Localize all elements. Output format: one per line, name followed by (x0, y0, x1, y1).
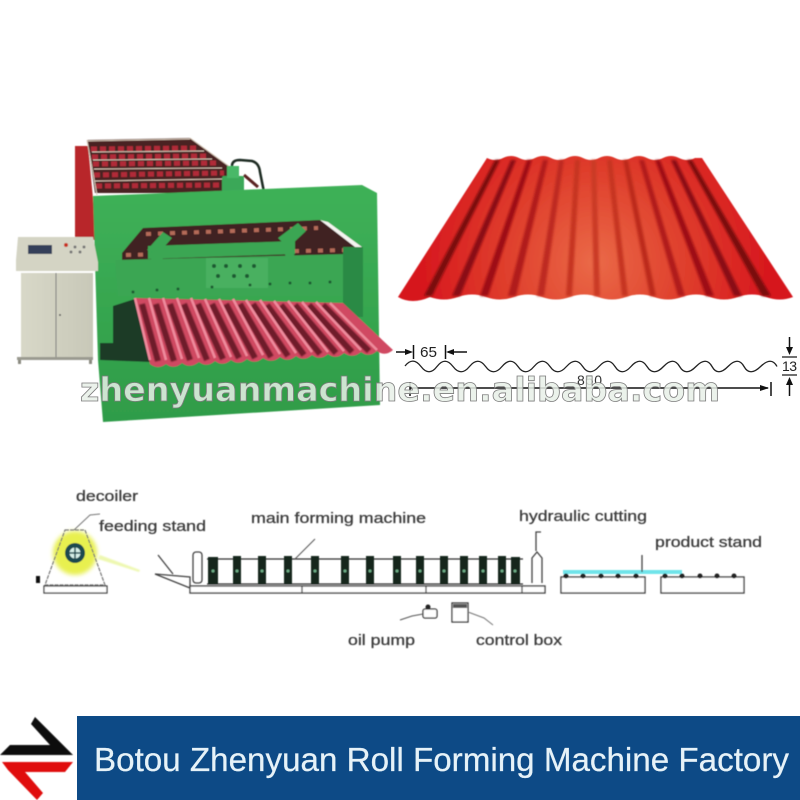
width dimension 850 (410, 372, 771, 396)
height dimension 13: 13 (782, 358, 797, 374)
cross beam and arms (115, 223, 347, 296)
company name: Botou Zhenyuan Roll Forming Machine Factory (94, 741, 789, 778)
schematic labels (76, 488, 762, 649)
roll forming machine photo (16, 138, 393, 422)
bolt plate (132, 258, 332, 294)
profile dimension drawing (396, 337, 797, 396)
control box icon (452, 603, 493, 625)
pitch dimension 65 (396, 344, 467, 361)
label: main forming machine: main forming machine (251, 510, 426, 527)
corrugation profile curve (405, 361, 777, 372)
control cabinet (16, 237, 98, 364)
sheet body (398, 156, 793, 301)
company logo (0, 717, 73, 800)
decoiler diagram (36, 514, 140, 593)
green machine body (93, 185, 380, 422)
lower dark cavity (100, 298, 150, 362)
product stand diagram (561, 555, 744, 593)
pitch dimension 65: 65 (420, 344, 437, 361)
label: decoiler: decoiler (76, 488, 138, 505)
right side plate (343, 247, 363, 317)
production line schematic (36, 488, 762, 649)
feeding stand diagram (155, 552, 202, 588)
label: product stand: product stand (655, 534, 762, 551)
red rear frame (75, 146, 97, 240)
corrugated red roof sheet (398, 156, 793, 301)
shaded corrugation grooves (424, 160, 771, 296)
width dimension 850: 850 (577, 372, 602, 388)
upstream roller rows (87, 138, 230, 195)
hydraulic cylinder and hoses (222, 160, 264, 198)
hydraulic cutting diagram (532, 532, 542, 583)
height dimension 13 (782, 337, 797, 396)
watermark: zhenyuanmachine.en.alibaba.com (80, 370, 720, 409)
label: oil pump: oil pump (348, 632, 415, 649)
blue title bar (77, 716, 800, 800)
label: hydraulic cutting: hydraulic cutting (519, 508, 647, 525)
footer banner (0, 716, 800, 800)
opening with rollers (122, 220, 362, 260)
oil pump icon (400, 604, 437, 620)
formed red sheet on machine (135, 298, 393, 367)
main forming machine diagram (190, 539, 545, 593)
label: control box: control box (476, 632, 563, 649)
label: feeding stand: feeding stand (99, 518, 206, 535)
